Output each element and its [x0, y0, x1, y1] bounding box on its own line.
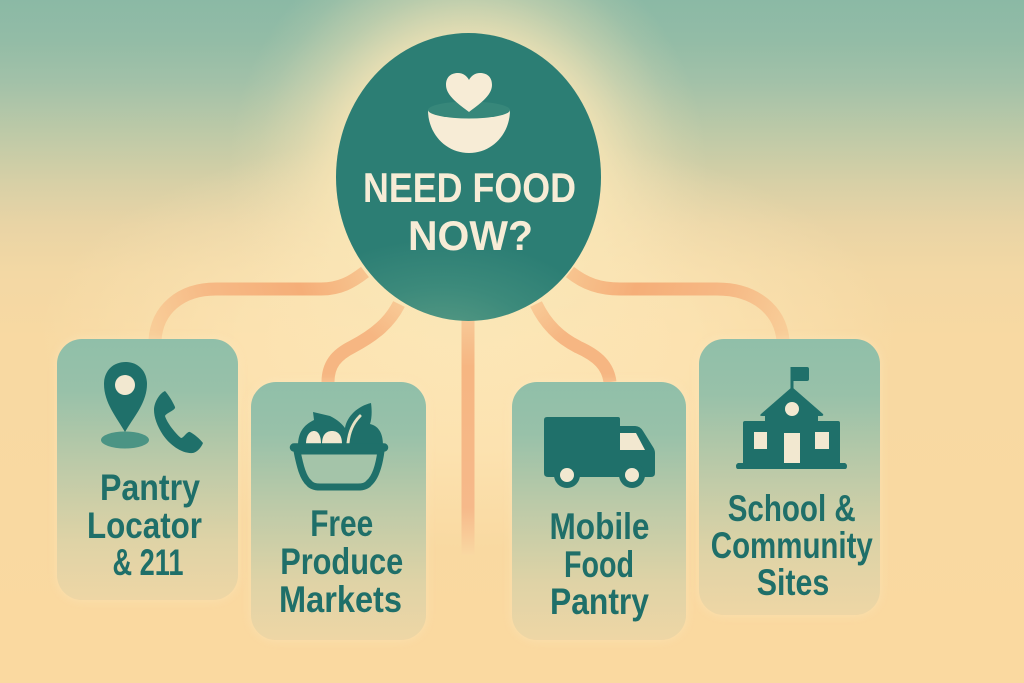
label: Mobile: [550, 506, 650, 547]
label: [550, 506, 650, 622]
label: Markets: [279, 579, 402, 620]
title: NEED FOOD: [363, 164, 576, 211]
label: [87, 467, 202, 583]
panel: pantry locator: [57, 339, 238, 600]
label: [279, 503, 403, 620]
label: Pantry: [550, 581, 649, 622]
label: Pantry: [100, 467, 200, 508]
panel: mobile food pantry: [512, 382, 686, 640]
central circle: need food now: [336, 33, 601, 321]
label: Free: [310, 503, 373, 544]
panel: school and community sites: [699, 339, 880, 615]
icon: school building: [736, 367, 847, 469]
label: School &: [728, 488, 856, 529]
title: NOW?: [408, 212, 533, 259]
title: [363, 164, 576, 259]
label: Produce: [280, 541, 403, 582]
label: & 211: [112, 542, 184, 583]
label: [711, 488, 873, 603]
label: Food: [564, 544, 634, 585]
icon: bowl with heart: [428, 73, 510, 153]
label: Community: [711, 525, 873, 566]
icon: produce basket: [294, 403, 384, 487]
icon: truck: [544, 417, 655, 488]
icon: map pin and phone: [101, 362, 203, 453]
label: Locator: [87, 505, 202, 546]
panel: free produce markets: [251, 382, 426, 640]
label: Sites: [757, 562, 829, 603]
